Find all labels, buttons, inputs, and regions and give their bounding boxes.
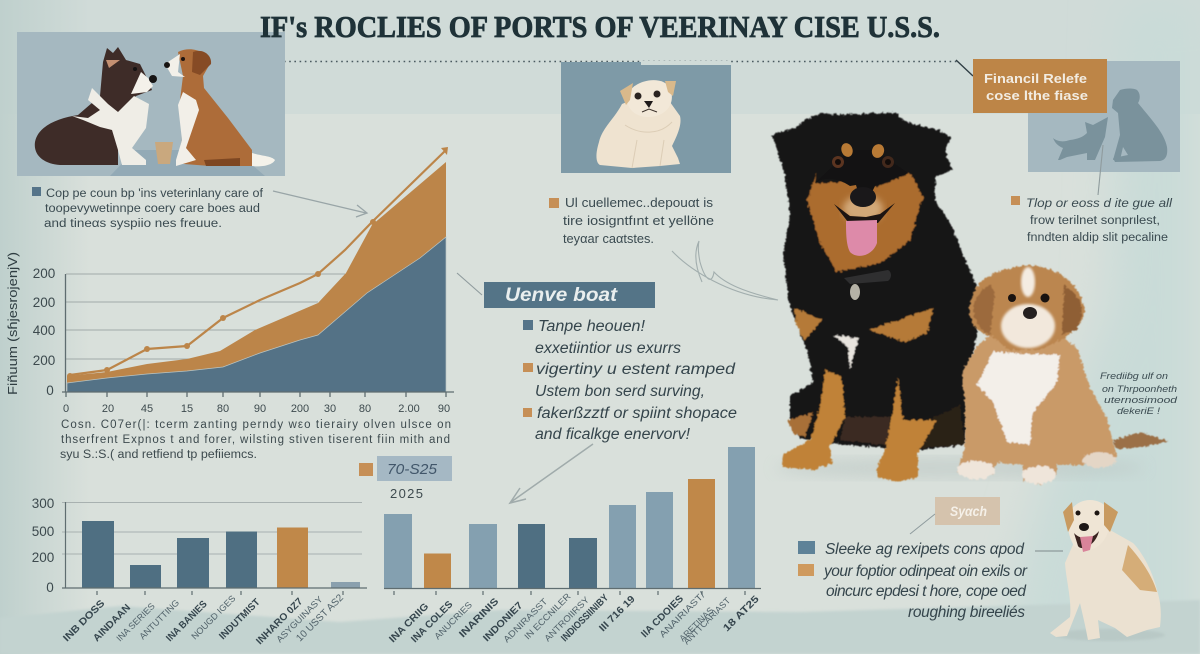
icon: small fluffy dog: [957, 265, 1168, 485]
icon: large black and tan dog: [772, 113, 977, 482]
icon: cream labrador: [1050, 500, 1165, 641]
legend text: bottom right: Sleeke ag rexipets cons αpod: [825, 541, 1025, 558]
arrow: list to bars: [510, 444, 593, 503]
heading banner: Uenve boat: [505, 285, 618, 306]
title: IF's ROCLIES OF PORTS OF VEERINAY CISE U.S.S.: [260, 9, 940, 44]
text block: chart caption: thserfrent Expnos t and forer, wilsting stiven tiserent fiin mith and: [61, 434, 450, 446]
y axis labels: [33, 266, 55, 398]
text block: chart caption: syu S.:S.( and retfiend tp pefiiemcs.: [60, 449, 257, 461]
category labels: INA CRIIG: [387, 601, 431, 645]
bullet list: centre: fakerßzztf or spiint shopace: [537, 405, 737, 422]
bullet list: centre: Tanpe heouen!: [538, 318, 646, 335]
text block: left intro: [32, 187, 264, 230]
category labels: INA SERIES: [114, 601, 157, 643]
category labels: INDONIE7: [481, 600, 526, 644]
x axis labels: 45: [141, 403, 153, 415]
y axis labels: [32, 496, 54, 595]
category labels: IN ECCNILER: [522, 591, 573, 641]
tag: synch: [935, 497, 1000, 525]
bullet list: centre: [523, 318, 737, 443]
text block: small side note: [1100, 371, 1178, 417]
x axis labels: 90: [438, 403, 450, 415]
text block: left intro: and tineαs sysрiio nes freuue.: [44, 218, 222, 230]
connector: tag to legend: [910, 514, 935, 534]
legend text: bottom right: your foptior odinpeat oin exils or: [823, 563, 1028, 580]
text block: centre note: tire iosigntfınt et yellöne: [563, 214, 714, 228]
x axis labels: [63, 403, 450, 415]
x axis labels: 30: [324, 403, 336, 415]
icon: dark and white dog: [35, 47, 157, 165]
category labels: ASYGUINASY: [274, 594, 325, 644]
y axis labels: 200: [32, 550, 54, 565]
connector: silhouette to note: [1098, 145, 1103, 195]
panel: cream puppy: [561, 61, 731, 173]
category labels: INDUTMIST: [217, 597, 263, 642]
text block: right note: [1011, 196, 1173, 244]
category labels: INA BANIES: [164, 599, 210, 644]
legend text: bottom right: roughing bireeliés: [908, 604, 1025, 621]
panel: silhouettes: [1028, 61, 1180, 172]
text block: chart caption: Cosn. C07er(|: tcerm zanting perndy wεo tierairy olven ulsce on: [61, 419, 451, 431]
category labels: INB DOSS: [61, 598, 108, 644]
mouth: [834, 203, 895, 223]
category labels: ANAIRIAST/: [657, 589, 707, 639]
dark forehead: [815, 150, 908, 192]
text block: left intro: toopevywetinnpe coery care boes aud: [45, 203, 260, 215]
x axis labels: 80: [217, 403, 229, 415]
callout: financial relief: Financil Relefe: [984, 71, 1087, 86]
bar chart: right: [384, 447, 762, 646]
text block: right note: frow terilnet sonprιlest,: [1030, 215, 1160, 227]
collar and tag: [844, 270, 891, 284]
legend: 70-S25: 70-S25: [387, 461, 438, 478]
text block: centre note: [549, 196, 714, 246]
icon: brown dog: [164, 49, 275, 166]
x axis labels: 0: [63, 403, 69, 415]
callout: financial relief: [973, 59, 1107, 113]
category labels: INARINIS: [457, 596, 501, 640]
category labels: [61, 592, 346, 647]
category labels: ANTROIIRSY: [542, 595, 591, 643]
category labels: ANUCRIES: [432, 600, 474, 641]
text block: right note: fnndten aldip slit pecaline: [1027, 232, 1168, 244]
y axis title: Fiñuum (sɦjesrojenjV): [5, 252, 20, 395]
text block: small side note: on Thrpoonɦeth: [1102, 384, 1177, 395]
category labels: 10 USST AS2: [294, 592, 346, 644]
icon: silhouette dog small: [1053, 117, 1108, 160]
arrow: swoosh to dog: [672, 241, 778, 300]
y axis labels: 500: [32, 524, 54, 539]
y axis labels: 200: [33, 295, 55, 310]
icon: cream puppy: [596, 80, 681, 168]
area chart: [5, 147, 454, 415]
tongue: [846, 220, 877, 256]
category labels: IIA CDOIES: [639, 593, 686, 640]
category labels: ARETINAS: [677, 605, 716, 643]
heading banner: [484, 282, 655, 308]
connector: chart to header: [457, 273, 482, 295]
bullet list: centre: exxetiintior us exurrs: [535, 340, 681, 357]
text block: small side note: uternosimood: [1104, 395, 1178, 406]
category labels: III 716 19: [597, 593, 638, 634]
category labels: AINDAAN: [91, 602, 133, 644]
legend: 70-S25: 2025: [390, 486, 423, 501]
y axis labels: 0: [46, 383, 54, 398]
connector: title to callout: [956, 60, 973, 76]
category labels: ADNIRASST: [501, 596, 550, 644]
category labels: ANTTCARIAST: [681, 595, 733, 646]
text block: small side note: Frediiɓg ulf on: [1100, 371, 1168, 382]
legend text: bottom right: [798, 541, 1028, 621]
tan face mask: [807, 172, 923, 272]
bullet list: centre: vigertiny u estent ramped: [536, 361, 737, 378]
floor shadow: [775, 457, 1145, 479]
y axis labels: 0: [46, 580, 54, 595]
panel: two illustrated dogs: [17, 32, 285, 176]
legend text: bottom right: oincurc epdesi t hore, cope oed: [826, 583, 1027, 600]
tag: synch: Syαch: [950, 503, 987, 519]
bullet list: centre: and ficalkge enervorv!: [535, 426, 691, 443]
category labels: INA COLES: [409, 599, 456, 645]
category labels: 18 AT25: [721, 593, 762, 634]
trend line: [67, 147, 448, 379]
text block: centre note: teyαar caαtstes.: [563, 232, 654, 246]
text block: centre note: Ul cuellemec..depouαt is: [565, 196, 713, 210]
text block: left intro: Cop pe coun bp 'ins veterinlany care of: [46, 188, 264, 200]
bullet list: centre: Ustem bon serd surving,: [535, 383, 705, 400]
text block: small side note: ɗekeriE !: [1117, 406, 1160, 417]
icon: silhouette dog large: [1112, 88, 1167, 162]
y axis labels: 300: [32, 496, 54, 511]
icon: cup: [155, 142, 173, 164]
y axis labels: 400: [33, 323, 55, 338]
connector: legend to dog: [1035, 550, 1063, 552]
bar chart: left: [32, 496, 367, 647]
y axis labels: 200: [33, 266, 55, 281]
text block: right note: Tlop or eoss d ite gue all: [1026, 198, 1173, 210]
legend: 70-S25: [359, 456, 452, 501]
y axis labels: 200: [33, 353, 55, 368]
x axis labels: 200: [291, 403, 309, 415]
x axis labels: 15: [181, 403, 193, 415]
category labels: [387, 589, 762, 646]
x axis labels: 90: [254, 403, 266, 415]
callout: financial relief: cose lthe fiase: [986, 88, 1088, 103]
dotted title rule: [284, 60, 957, 62]
orange area: [67, 162, 446, 383]
x axis labels: 20: [102, 403, 114, 415]
text block: chart caption: [60, 419, 451, 461]
category labels: INDIOSSIINIBY: [559, 592, 611, 644]
category labels: ANTUTTING: [137, 598, 181, 641]
blue area: [67, 237, 446, 392]
category labels: INHARO 0Z7: [254, 596, 306, 647]
arrow: intro to chart: [273, 191, 367, 217]
x axis labels: 80: [359, 403, 371, 415]
category labels: NOUGD IGES: [189, 593, 237, 641]
x axis labels: 2.00: [398, 403, 420, 415]
